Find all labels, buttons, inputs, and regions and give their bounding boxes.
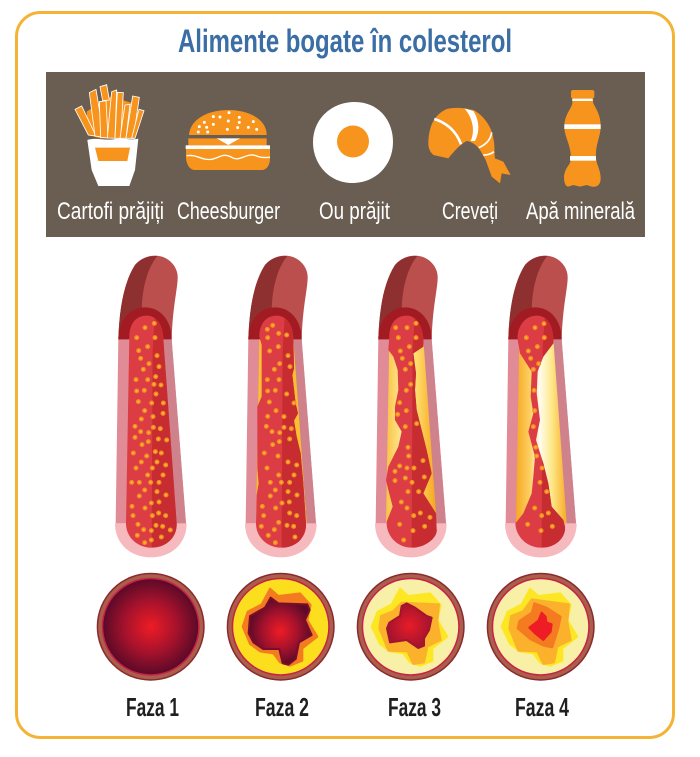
label: egg: Ou prăjit bbox=[319, 198, 390, 225]
label: burger: Cheesburger bbox=[177, 198, 280, 225]
icon: burger bbox=[186, 110, 270, 170]
label: shrimp: Creveți bbox=[442, 198, 498, 225]
icon: fries bbox=[75, 85, 144, 186]
label: bottle: Apă minerală bbox=[526, 198, 635, 225]
label: phase 2: Faza 2 bbox=[255, 692, 309, 722]
cross-section: phase 2 bbox=[227, 573, 335, 681]
cross-section: phase 3 bbox=[357, 573, 465, 681]
label: phase 3: Faza 3 bbox=[388, 692, 441, 722]
title: Alimente bogate în colesterol bbox=[178, 23, 512, 59]
artery: phase 1 bbox=[115, 256, 190, 557]
label: phase 4: Faza 4 bbox=[515, 692, 569, 722]
artery: phase 2 bbox=[245, 256, 320, 557]
icon: shrimp bbox=[428, 108, 511, 183]
label: fries: Cartofi prăjiți bbox=[57, 198, 164, 225]
icon: bottle bbox=[564, 90, 601, 187]
artery: phase 4 bbox=[505, 256, 580, 557]
panel: foods bbox=[46, 72, 645, 237]
artery: phase 3 bbox=[375, 256, 450, 557]
cross-section: phase 1 bbox=[97, 573, 205, 681]
cross-section: phase 4 bbox=[487, 573, 595, 681]
label: phase 1: Faza 1 bbox=[126, 692, 179, 722]
icon: fried egg bbox=[313, 102, 393, 183]
